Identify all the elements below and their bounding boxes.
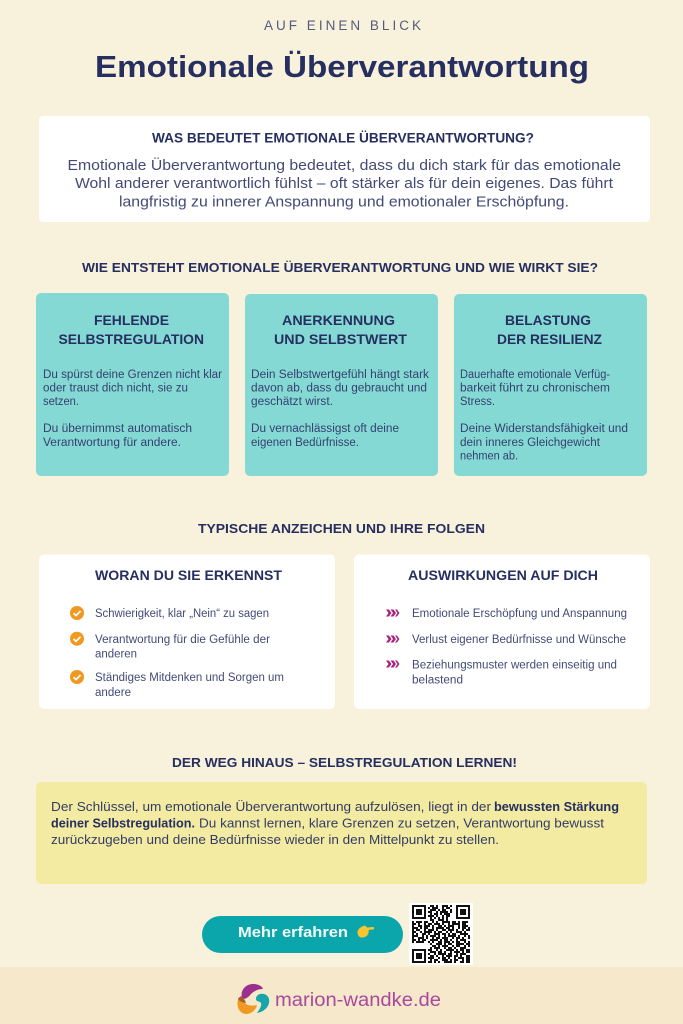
panel: Belastung der Resilienz xyxy=(454,294,647,476)
list item 1: Schwierigkeit, klar „Nein“ zu sagen xyxy=(95,608,269,620)
card heading: DER RESILIENZ xyxy=(497,331,602,347)
panel heading: WORAN DU SIE ERKENNST xyxy=(95,567,282,583)
footer band xyxy=(0,967,683,1024)
callout text: Du kannst lernen, klare Grenzen zu setzen, Verantwortung bewusst xyxy=(199,816,605,830)
card text: nehmen ab. xyxy=(460,450,518,462)
card text: Du übernimmst automatisch xyxy=(43,423,192,435)
definition text xyxy=(68,156,621,210)
panel: Anerkennung und Selbstwert xyxy=(245,294,438,476)
card heading xyxy=(274,312,407,347)
list item 2: Verlust eigener Bedürfnisse und Wünsche xyxy=(412,634,626,646)
callout text: zurückzugeben und deine Bedürfnisse wieder in den Mittelpunkt zu stellen. xyxy=(51,833,499,847)
card text: setzen. xyxy=(43,396,79,408)
panel: Selbstregulation callout xyxy=(36,782,647,884)
panel: woran du sie erkennst xyxy=(39,554,335,709)
panel: fehlende Selbstregulation xyxy=(36,293,229,476)
list item 2 xyxy=(95,634,270,660)
callout text: bewussten Stärkung xyxy=(494,800,619,814)
QR code xyxy=(409,903,473,965)
list item 2: Verantwortung für die Gefühle der xyxy=(95,634,270,646)
eyebrow: auf einen Blick: AUF EINEN BLICK xyxy=(264,18,421,33)
list item 3: andere xyxy=(95,687,131,699)
icon: check 1 xyxy=(70,606,84,620)
callout text: Der Schlüssel, um emotionale Überverantwortung aufzulösen, liegt in der xyxy=(51,800,491,814)
callout text xyxy=(51,800,619,847)
card text xyxy=(251,369,429,449)
list item 3 xyxy=(412,660,617,686)
card text: dein inneres Gleichgewicht xyxy=(460,437,601,449)
definition text: Wohl anderer verantwortlich fühlst – oft stärker als für dein eigenes. Das führt xyxy=(75,176,613,192)
card text: Verantwortung für andere. xyxy=(43,437,181,449)
list item 3: belastend xyxy=(412,674,463,686)
icon: pointing hand xyxy=(358,926,374,938)
card text: Deine Widerstandsfähigkeit und xyxy=(460,423,628,435)
card heading: FEHLENDE xyxy=(94,312,169,328)
icon: check 2 xyxy=(70,632,84,646)
section heading: Anzeichen: TYPISCHE ANZEICHEN UND IHRE FOLGEN xyxy=(198,521,485,536)
card heading xyxy=(497,312,602,347)
card heading: UND SELBSTWERT xyxy=(274,331,407,347)
website name: marion-wandke.de xyxy=(275,990,441,1011)
card heading: SELBSTREGULATION xyxy=(58,331,204,347)
panel heading: AUSWIRKUNGEN AUF DICH xyxy=(408,567,598,583)
definition text: langfristig zu innerer Anspannung und emotionaler Erschöpfung. xyxy=(119,194,569,210)
button: mehr erfahren: Mehr erfahren xyxy=(238,924,348,941)
card text: oder traust dich nicht, sie zu xyxy=(43,382,188,394)
card text: davon ab, dass du gebraucht und xyxy=(251,382,427,394)
icon: chevrons 2 xyxy=(386,636,400,642)
card text: Du vernachlässigst oft deine xyxy=(251,423,399,435)
icon: logo xyxy=(237,984,269,1014)
card text: eigenen Bedürfnisse. xyxy=(251,437,359,449)
card text xyxy=(460,369,628,462)
title: Emotionale Überverantwortung xyxy=(95,49,589,84)
callout text: deiner Selbstregulation. xyxy=(51,816,195,830)
section heading: Weg hinaus: DER WEG HINAUS – SELBSTREGULATION LERNEN! xyxy=(172,755,517,770)
card heading: BELASTUNG xyxy=(505,312,591,328)
button: mehr erfahren xyxy=(202,916,403,953)
section heading: Entstehung: WIE ENTSTEHT EMOTIONALE ÜBERVERANTWORTUNG UND WIE WIRKT SIE? xyxy=(82,260,598,275)
card text: Dein Selbstwertgefühl hängt stark xyxy=(251,369,429,381)
card text: Dauerhafte emotionale Verfüg- xyxy=(460,369,610,381)
card text: Stress. xyxy=(460,396,495,408)
card text: Du spürst deine Grenzen nicht klar xyxy=(43,369,222,381)
list item 3: Beziehungsmuster werden einseitig und xyxy=(412,660,617,672)
definition text: Emotionale Überverantwortung bedeutet, dass du dich stark für das emotionale xyxy=(68,156,621,174)
panel: Auswirkungen auf dich xyxy=(354,554,650,709)
card text: geschätzt wirst. xyxy=(251,396,333,408)
list item 2: anderen xyxy=(95,648,137,660)
card text: barkeit führt zu chronischem xyxy=(460,382,610,394)
list item 1: Emotionale Erschöpfung und Anspannung xyxy=(412,608,627,620)
definition heading: WAS BEDEUTET EMOTIONALE ÜBERVERANTWORTUNG? xyxy=(152,130,534,146)
panel: definition xyxy=(39,116,650,222)
icon: check 3 xyxy=(70,670,84,684)
list item 3: Ständiges Mitdenken und Sorgen um xyxy=(95,672,284,684)
icon: chevrons 1 xyxy=(386,610,400,616)
card text xyxy=(43,369,222,449)
card heading xyxy=(58,312,204,347)
card heading: ANERKENNUNG xyxy=(282,312,395,328)
icon: chevrons 3 xyxy=(386,660,400,668)
list item 3 xyxy=(95,672,284,699)
